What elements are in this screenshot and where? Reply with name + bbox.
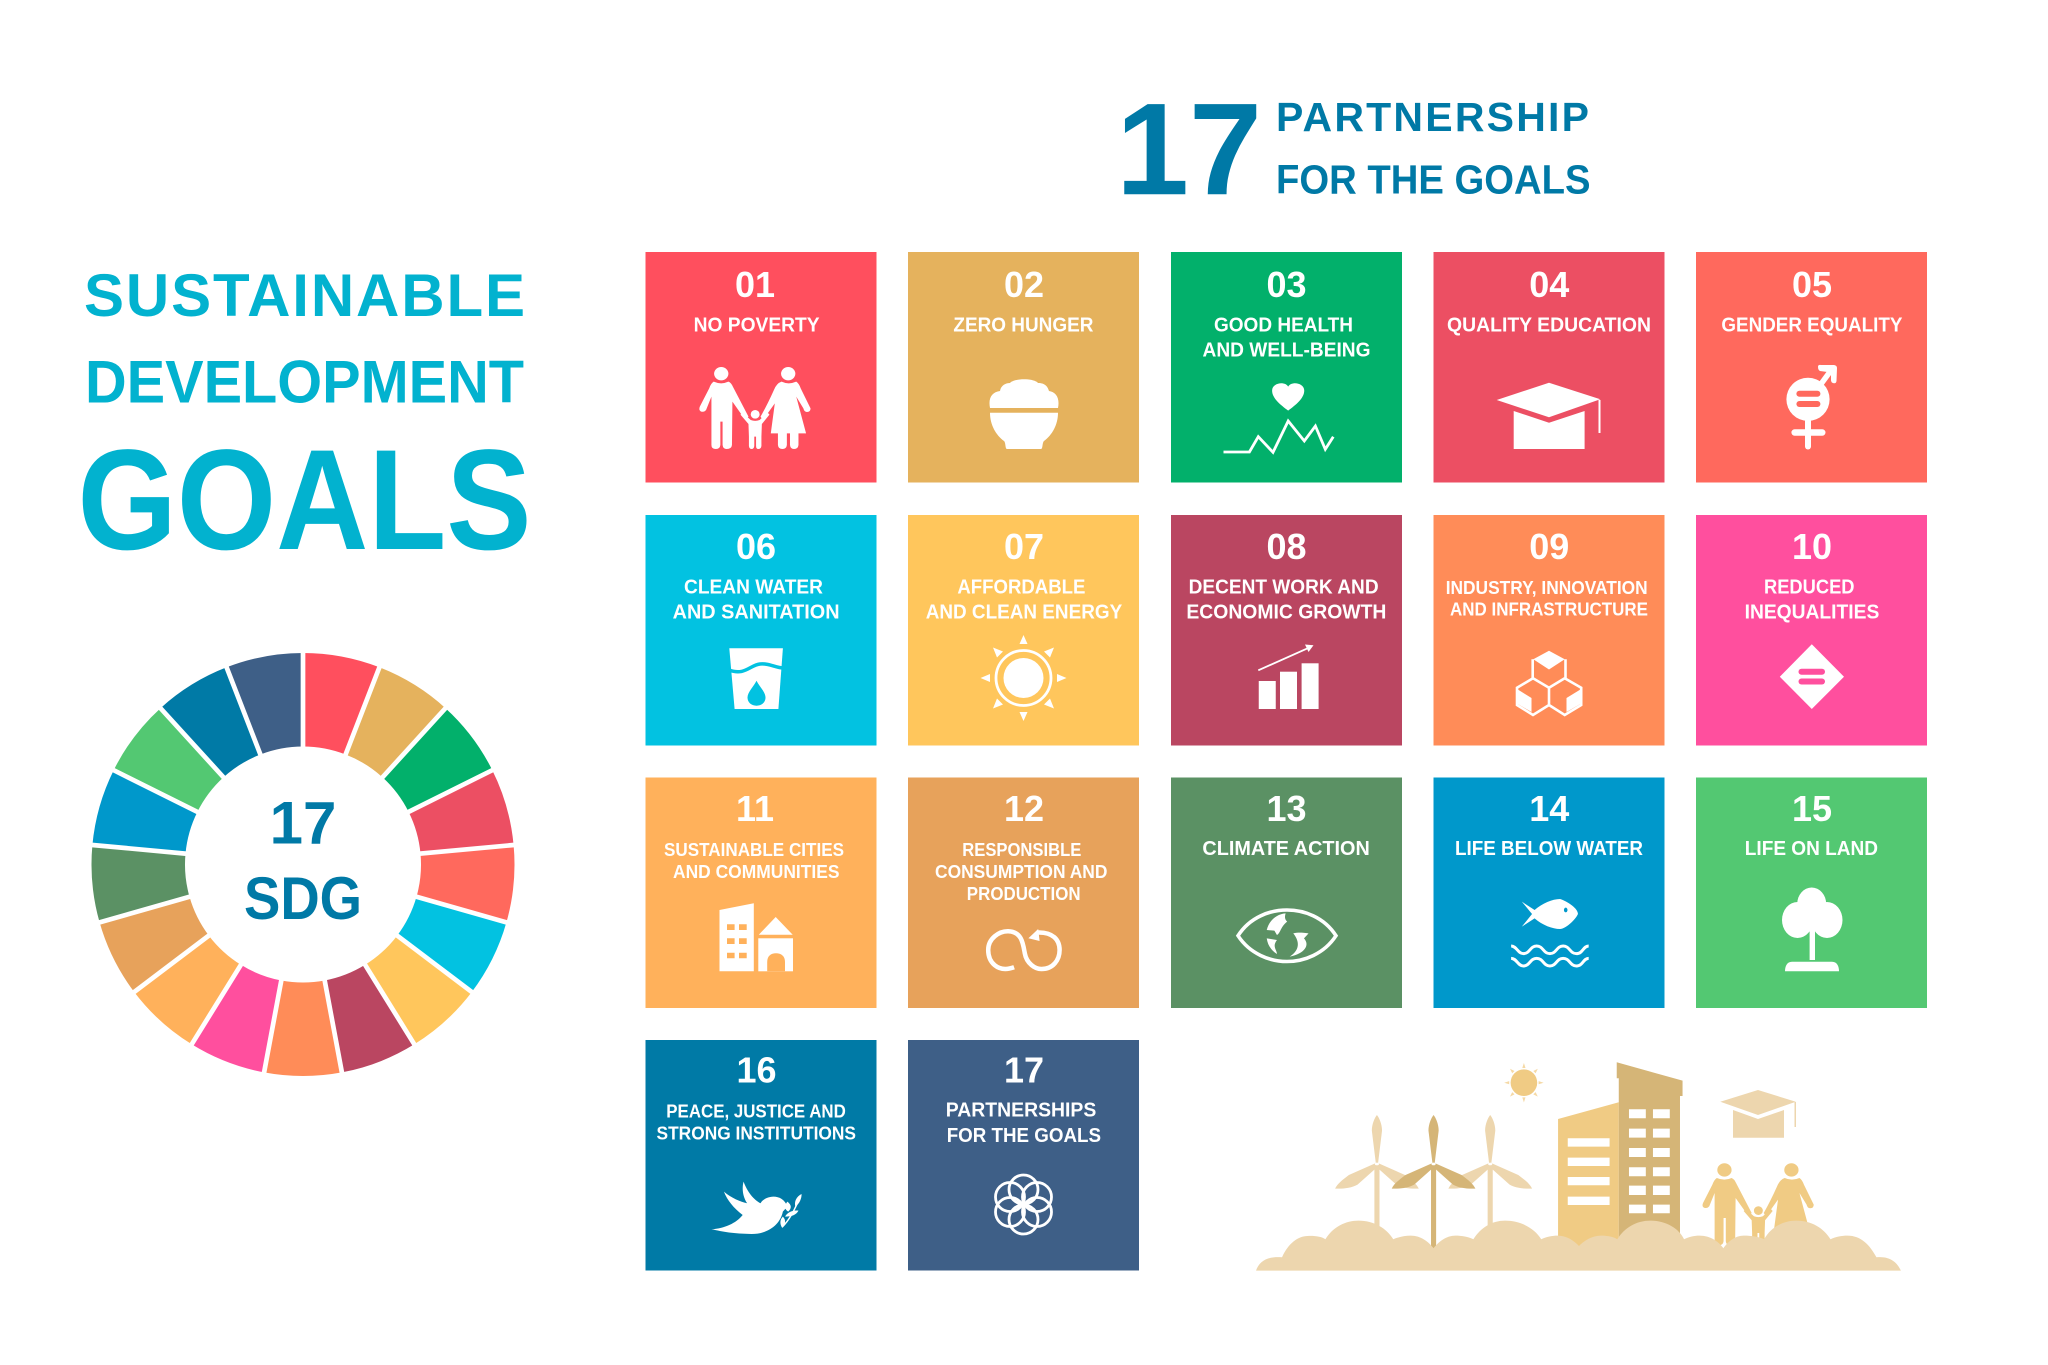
icon: cubes: [1517, 651, 1581, 715]
label: partnerships for the goals: [946, 1099, 1101, 1147]
label: industry, innovation and infrastructure: [1446, 577, 1648, 620]
label: partnerships for the goals: FOR THE GOALS: [947, 1124, 1101, 1147]
number 05: 05: [1792, 264, 1832, 305]
label: life below water: LIFE BELOW WATER: [1455, 837, 1643, 860]
label: partnerships for the goals: PARTNERSHIPS: [946, 1099, 1096, 1122]
label: sustainable cities and communities: SUSTAINABLE CITIES: [664, 839, 844, 860]
number 08: 08: [1266, 526, 1307, 567]
segment 17: [227, 653, 303, 754]
office buildings: [1558, 1062, 1683, 1247]
label: decent work and economic growth: DECENT WORK AND: [1189, 576, 1379, 598]
wheel centre label: 17: [270, 790, 336, 856]
label: responsible consumption and production: PRODUCTION: [967, 883, 1081, 904]
icon: rice bowl: [989, 379, 1059, 449]
label: life on land: LIFE ON LAND: [1745, 837, 1878, 860]
illustration: sustainable landscape: [1256, 1062, 1901, 1271]
number 09: 09: [1529, 526, 1569, 567]
title: sustainable development goals: [78, 262, 532, 580]
number 01: 01: [735, 264, 775, 305]
segment 05: [416, 845, 514, 922]
label: peace, justice and strong institutions: [656, 1100, 856, 1144]
family silhouette: [1703, 1163, 1814, 1245]
number 10: 10: [1792, 526, 1832, 567]
segment 10: [192, 965, 281, 1072]
segment 11: [134, 936, 241, 1044]
tile 05: gender equality: [1696, 252, 1927, 482]
label: no poverty: NO POVERTY: [694, 314, 820, 336]
icon: heart and pulse: [1224, 383, 1333, 452]
label: climate action: CLIMATE ACTION: [1202, 837, 1370, 860]
icon: graduation cap: [1497, 383, 1600, 449]
tile 01: no poverty: [646, 252, 876, 482]
label: clean water and sanitation: [673, 576, 840, 624]
icon: water glass: [729, 648, 784, 709]
label: sustainable cities and communities: AND COMMUNITIES: [673, 861, 840, 882]
icon: dove with olive branch: [711, 1182, 802, 1234]
title: sustainable development goals: SUSTAINABLE: [84, 262, 525, 329]
segment 13: [92, 845, 190, 922]
title: sustainable development goals: GOALS: [78, 421, 532, 580]
tile 06: clean water and sanitation: [646, 515, 876, 746]
segment 12: [100, 897, 209, 992]
tile 17: partnerships for the goals: [908, 1040, 1139, 1270]
chart: 17 segment SDG wheel: [92, 653, 514, 1076]
segment 16: [160, 667, 260, 777]
tile 08: decent work and economic growth: [1171, 515, 1402, 746]
number 03: 03: [1266, 264, 1307, 305]
wheel centre label: SDG: [244, 865, 362, 932]
label: gender equality: GENDER EQUALITY: [1721, 314, 1903, 336]
icon: gender symbol: [1786, 365, 1837, 450]
segment 01: [303, 653, 379, 754]
icon: sun: [980, 635, 1066, 721]
label: affordable and clean energy: AFFORDABLE: [957, 576, 1085, 598]
title: sustainable development goals: DEVELOPMENT: [85, 348, 524, 416]
label: decent work and economic growth: ECONOMIC GROWTH: [1186, 600, 1386, 624]
tile 12: responsible consumption and production: [908, 778, 1139, 1008]
tile 13: climate action: [1171, 778, 1402, 1008]
clouds ground: [1256, 1221, 1901, 1271]
number 06: 06: [736, 526, 776, 567]
label: affordable and clean energy: [926, 576, 1122, 624]
number 12: 12: [1004, 788, 1044, 829]
label: good health and well-being: [1202, 314, 1370, 362]
tile 03: good health and well-being: [1171, 252, 1402, 482]
label: industry, innovation and infrastructure: INDUSTRY, INNOVATION: [1446, 577, 1648, 598]
icon: diamond equals: [1780, 644, 1844, 709]
number 11: 11: [736, 788, 774, 829]
tile 09: industry, innovation and infrastructure: [1434, 515, 1664, 746]
label: peace, justice and strong institutions: STRONG INSTITUTIONS: [656, 1122, 856, 1144]
segment 06: [397, 897, 506, 992]
label: clean water and sanitation: CLEAN WATER: [684, 576, 823, 598]
small sun: [1504, 1063, 1544, 1102]
label: sustainable cities and communities: [664, 839, 844, 882]
label: responsible consumption and production: [935, 839, 1107, 904]
tile 15: life on land: [1696, 778, 1927, 1008]
icon: tree: [1782, 888, 1842, 971]
label: peace, justice and strong institutions: PEACE, JUSTICE AND: [666, 1100, 846, 1122]
icon: growth chart: [1258, 644, 1319, 709]
icon: eye with globe: [1238, 910, 1336, 962]
heading: 17 partnership for the goals: PARTNERSHIP: [1276, 94, 1589, 140]
tile 04: quality education: [1434, 252, 1664, 482]
label: good health and well-being: GOOD HEALTH: [1214, 314, 1353, 336]
label: reduced inequalities: INEQUALITIES: [1745, 600, 1879, 624]
number 14: 14: [1529, 788, 1569, 829]
segment 04: [409, 770, 514, 854]
number 13: 13: [1266, 788, 1307, 829]
icon: family: [699, 367, 811, 449]
label: zero hunger: ZERO HUNGER: [953, 314, 1094, 336]
label: reduced inequalities: REDUCED: [1764, 576, 1854, 598]
tile 11: sustainable cities and communities: [646, 778, 876, 1008]
number 04: 04: [1529, 264, 1569, 305]
label: industry, innovation and infrastructure: AND INFRASTRUCTURE: [1450, 599, 1648, 620]
tile 16: peace, justice and strong institutions: [646, 1040, 876, 1270]
number 17: 17: [1004, 1050, 1044, 1091]
segment 15: [114, 708, 224, 812]
icon: fish and waves: [1511, 899, 1589, 966]
label: reduced inequalities: [1745, 576, 1879, 624]
segment 08: [325, 965, 414, 1072]
wheel centre label: [244, 790, 362, 932]
label: good health and well-being: AND WELL-BEING: [1202, 338, 1370, 362]
label: responsible consumption and production: CONSUMPTION AND: [935, 861, 1107, 882]
label: clean water and sanitation: AND SANITATION: [673, 600, 840, 624]
number 07: 07: [1004, 526, 1044, 567]
segment 03: [382, 708, 492, 812]
heading: 17 partnership for the goals: FOR THE GOALS: [1276, 156, 1590, 202]
icon: city buildings: [720, 903, 793, 971]
segment 02: [346, 667, 446, 777]
number 16: 16: [736, 1050, 777, 1091]
icon: recycling loop: [988, 929, 1060, 969]
label: affordable and clean energy: AND CLEAN ENERGY: [926, 600, 1122, 624]
icon: interlocking rings flower: [996, 1175, 1052, 1234]
number 15: 15: [1792, 788, 1832, 829]
segment 09: [264, 980, 342, 1076]
tile 02: zero hunger: [908, 252, 1139, 482]
tile 07: affordable and clean energy: [908, 515, 1139, 746]
heading: 17 partnership for the goals: [1116, 75, 1590, 222]
label: responsible consumption and production: RESPONSIBLE: [962, 839, 1081, 860]
label: quality education: QUALITY EDUCATION: [1447, 314, 1651, 336]
tile 14: life below water: [1434, 778, 1664, 1008]
wind turbines: [1335, 1115, 1532, 1251]
tile 10: reduced inequalities: [1696, 515, 1927, 746]
segment 07: [365, 936, 472, 1044]
heading: 17 partnership for the goals: 17: [1116, 75, 1262, 222]
segment 14: [92, 770, 197, 854]
graduation cap: [1720, 1090, 1796, 1138]
label: decent work and economic growth: [1186, 576, 1386, 624]
number 02: 02: [1004, 264, 1044, 305]
